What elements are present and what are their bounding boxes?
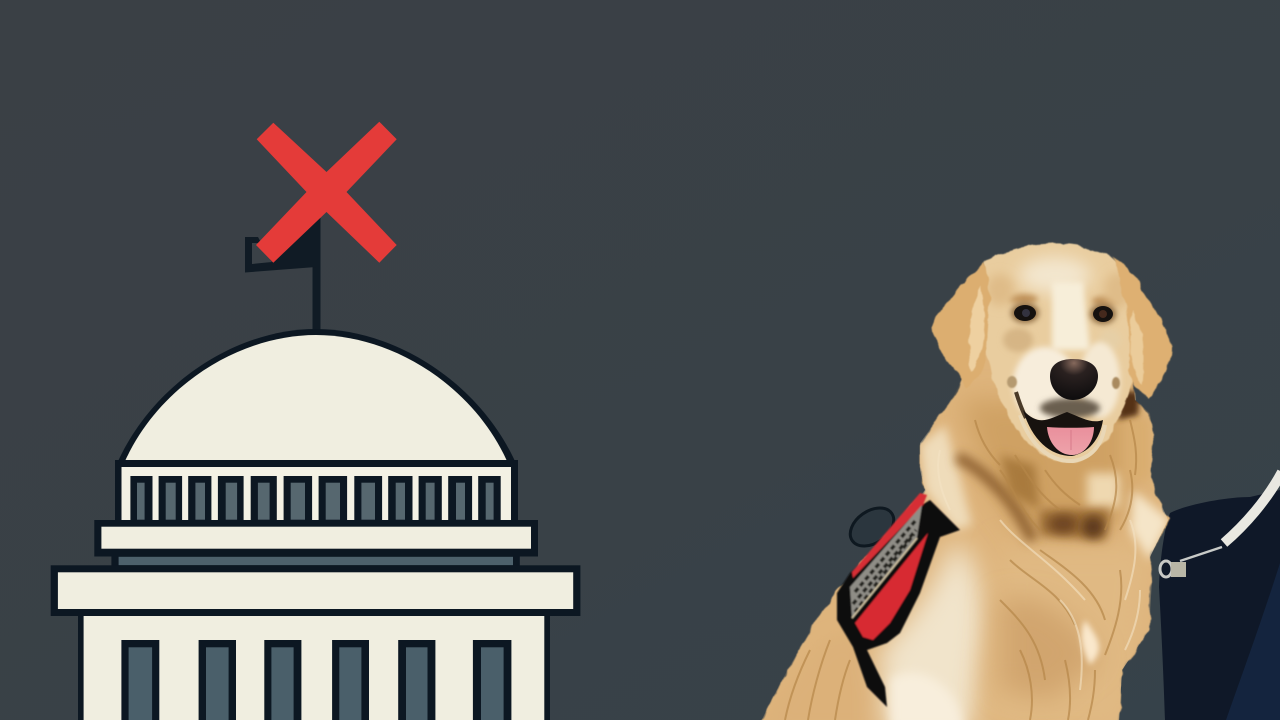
dome [115, 329, 518, 468]
service vest [837, 493, 960, 707]
right eye [1090, 304, 1116, 324]
upper red panel [852, 493, 927, 578]
fur shading [760, 390, 1170, 720]
drum with colonnade [115, 460, 518, 526]
icon: red X [256, 122, 397, 263]
left ear [933, 262, 990, 387]
blue trouser leg [1226, 563, 1280, 720]
icon: capitol building [51, 204, 580, 720]
leash and clasp [1160, 472, 1280, 577]
dog: golden retriever [752, 243, 1172, 720]
nose [1050, 359, 1098, 400]
harness handle loop [843, 500, 901, 554]
tan ruff overlay [960, 400, 1130, 545]
face markings [986, 257, 1132, 423]
lower cornice [51, 565, 580, 616]
vest black backing and strap [837, 500, 960, 707]
tongue [1047, 427, 1094, 455]
right ear [1113, 257, 1172, 400]
building wall with windows [78, 615, 550, 720]
navy clothing [1159, 490, 1280, 720]
recessed strip [111, 556, 520, 566]
upper cornice [94, 520, 538, 556]
head [982, 243, 1141, 463]
dog body [761, 349, 1171, 720]
person in navy seated at right [1159, 490, 1280, 720]
mouth [1016, 392, 1105, 461]
lower red panel [855, 533, 928, 640]
patterned reflective strip [850, 505, 922, 617]
flag and pole [245, 204, 320, 332]
brown ruff band [957, 457, 1033, 540]
left eye [1011, 303, 1039, 323]
illustration: capitol dome crossed out beside service dog [50, 122, 1280, 720]
